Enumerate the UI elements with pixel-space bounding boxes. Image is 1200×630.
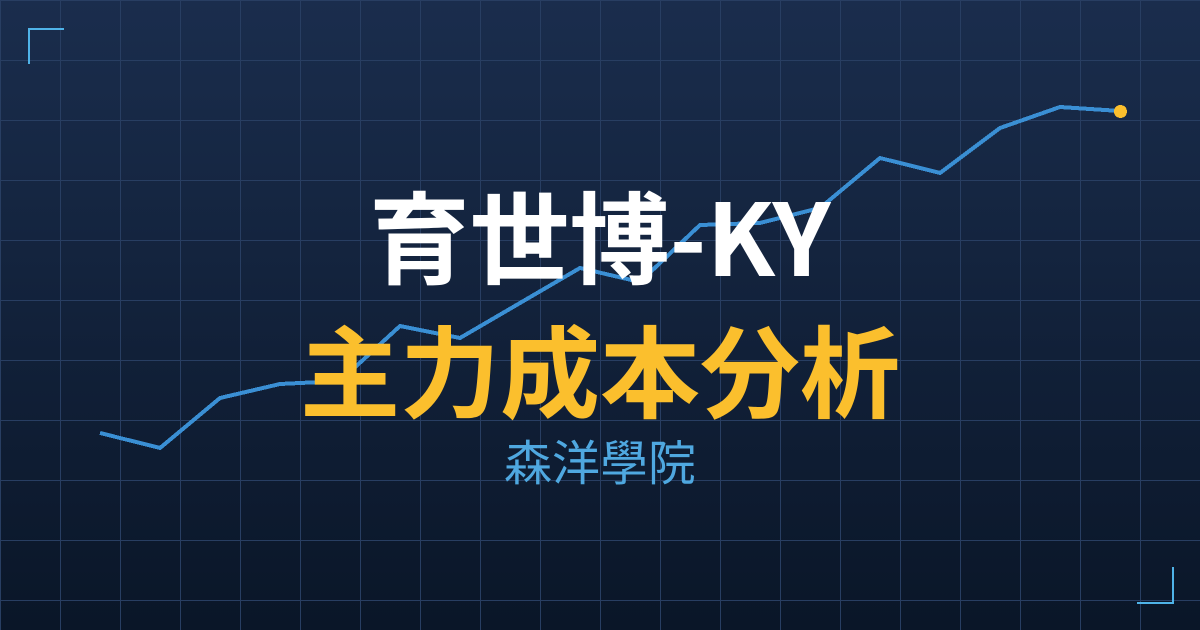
subtitle: 主力成本分析	[300, 294, 900, 439]
brand label: 森洋學院	[504, 424, 696, 494]
corner bracket: bottom right	[1137, 567, 1173, 603]
corner bracket: top left	[29, 29, 64, 64]
title: 育世博-KY	[370, 160, 831, 305]
line chart	[100, 105, 1127, 448]
